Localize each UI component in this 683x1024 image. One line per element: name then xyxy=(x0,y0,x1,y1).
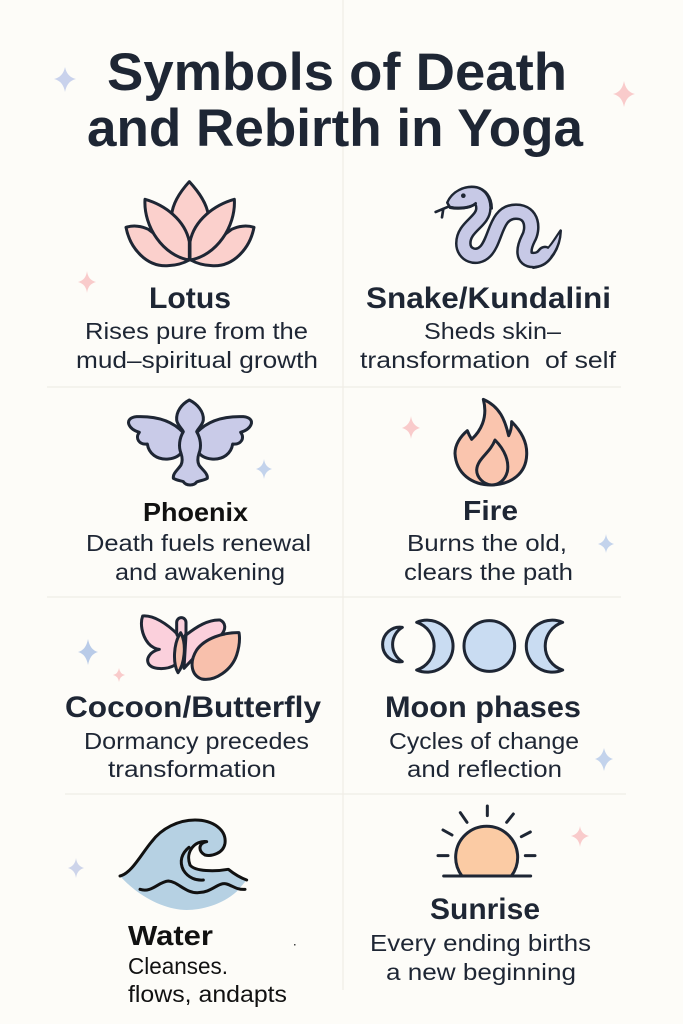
heading: Moon phases: Moon phases xyxy=(385,691,581,724)
panel: moon phases xyxy=(383,620,581,782)
icon: fire xyxy=(455,399,527,485)
panel: fire xyxy=(404,399,573,585)
text: butterfly description: transformation xyxy=(108,756,276,782)
text: snake description: Sheds skin– xyxy=(424,318,561,344)
text: moon description xyxy=(389,728,579,782)
heading: Sunrise: Sunrise xyxy=(430,893,540,926)
text: water description: flows, andapts xyxy=(128,981,287,1007)
text: moon description: and reflection xyxy=(407,756,562,782)
text: sunrise description: Every ending births xyxy=(370,930,591,956)
text: phoenix description xyxy=(86,530,311,585)
heading: Phoenix: Phoenix xyxy=(143,497,249,527)
icon: lotus xyxy=(126,182,254,266)
title: and Rebirth in Yoga xyxy=(87,99,584,158)
text: fire description xyxy=(404,530,573,585)
icon: butterfly xyxy=(141,616,239,679)
panel: snake xyxy=(360,187,617,373)
icon: phoenix xyxy=(129,400,251,485)
text: lotus description: mud–spiritual growth xyxy=(76,347,318,373)
text: phoenix description: Death fuels renewal xyxy=(86,530,311,556)
panel: lotus xyxy=(76,182,318,373)
text: fire description: Burns the old, xyxy=(407,530,567,556)
icon: moon phases xyxy=(383,620,563,672)
heading: Water: Water xyxy=(128,920,213,951)
panel: water xyxy=(120,820,287,1007)
text: water description xyxy=(128,953,287,1007)
title: Symbols of Death xyxy=(107,43,567,102)
text: sunrise description xyxy=(370,930,591,985)
text: sunrise description: a new beginning xyxy=(386,959,576,985)
heading: Fire: Fire xyxy=(463,495,518,526)
heading: Lotus: Lotus xyxy=(149,282,231,315)
title xyxy=(87,43,584,158)
text: butterfly description: Dormancy precedes xyxy=(84,728,309,754)
icon: snake xyxy=(436,187,561,268)
text: moon description: Cycles of change xyxy=(389,728,579,754)
text: butterfly description xyxy=(84,728,309,782)
icon: wave xyxy=(120,820,247,910)
heading: Cocoon/Butterfly: Cocoon/Butterfly xyxy=(65,691,321,724)
text: lotus description: Rises pure from the xyxy=(85,318,308,344)
text: phoenix description: and awakening xyxy=(115,559,285,585)
text: water description: Cleanses. xyxy=(128,953,228,979)
panel: phoenix xyxy=(86,400,311,585)
text: snake description: transformation of self xyxy=(360,347,617,373)
decorative sparkles xyxy=(54,67,635,946)
heading: Snake/Kundalini: Snake/Kundalini xyxy=(366,282,611,315)
panel: cocoon / butterfly xyxy=(65,616,321,782)
text: fire description: clears the path xyxy=(404,559,573,585)
text: lotus description xyxy=(76,318,318,373)
icon: sun xyxy=(438,806,535,876)
text: snake description xyxy=(360,318,617,373)
panel: sunrise xyxy=(370,806,591,985)
